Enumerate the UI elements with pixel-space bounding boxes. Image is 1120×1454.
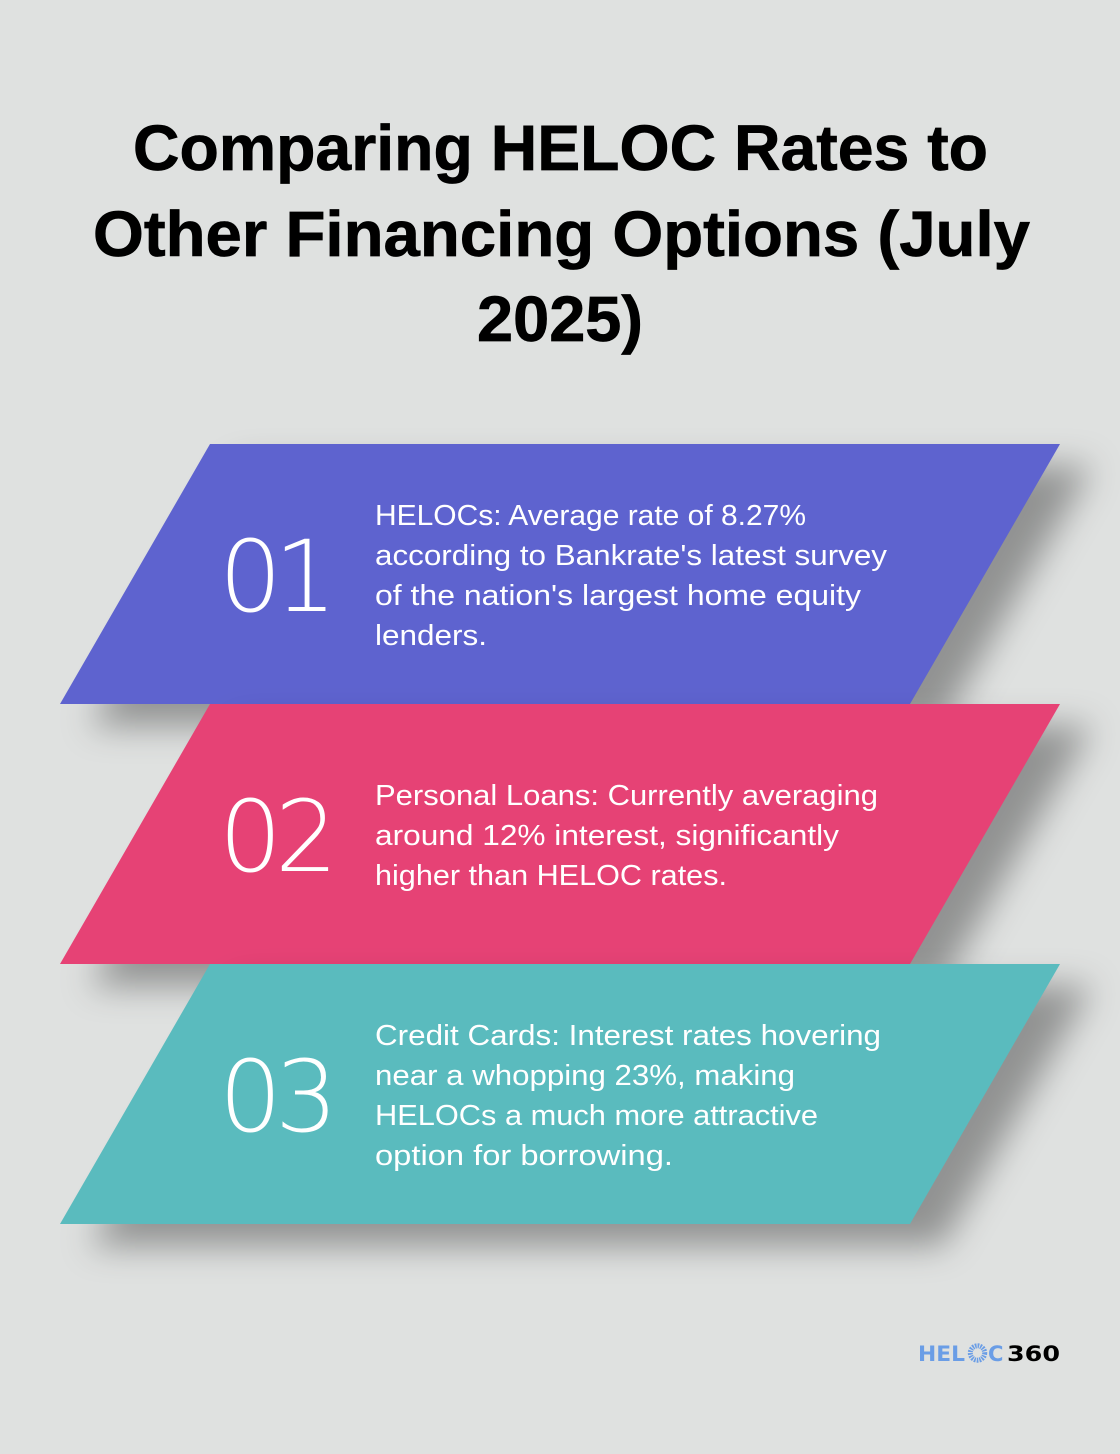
text: HELOCs: HELOCs: Average rate of 8.27% [375,500,806,532]
title: Other Financing Options (July [93,198,1030,270]
panel: HELOCs card [60,444,1092,726]
text: Personal Loans: around 12% interest, significantly [375,820,840,852]
card shape: Credit Cards [60,964,1060,1224]
number 03: 03 [219,1040,338,1155]
logo: HELOC360: HEL [918,1342,965,1366]
icon: swirl O [970,1346,985,1360]
text: Personal Loans: Personal Loans: Currently averaging [375,780,878,812]
text: Personal Loans [375,780,878,892]
logo: HELOC360: 360 [1007,1342,1060,1366]
text: Credit Cards: near a whopping 23%, making [375,1060,795,1092]
text: Credit Cards: Credit Cards: Interest rates hovering [375,1020,881,1052]
number 01: 01 [219,520,337,635]
logo: HELOC360: C [988,1342,1004,1366]
title: Comparing HELOC Rates to [133,112,988,184]
card shape: HELOCs [60,444,1060,704]
text: HELOCs: of the nation's largest home equity [375,580,862,612]
text: HELOCs: according to Bankrate's latest survey [375,540,888,572]
title [93,112,1030,355]
text: Credit Cards [375,1020,881,1172]
text: HELOCs [375,500,888,652]
panel: Credit Cards card [60,964,1092,1246]
title: 2025) [477,283,643,355]
panel: Personal Loans card [60,704,1092,986]
text: Credit Cards: option for borrowing. [375,1140,673,1172]
card shape: Personal Loans [60,704,1060,964]
text: Credit Cards: HELOCs a much more attractive [375,1100,818,1132]
text: HELOCs: lenders. [375,620,487,652]
number 02: 02 [219,780,338,895]
logo: HELOC360 [918,1342,1060,1366]
text: Personal Loans: higher than HELOC rates. [375,860,727,892]
